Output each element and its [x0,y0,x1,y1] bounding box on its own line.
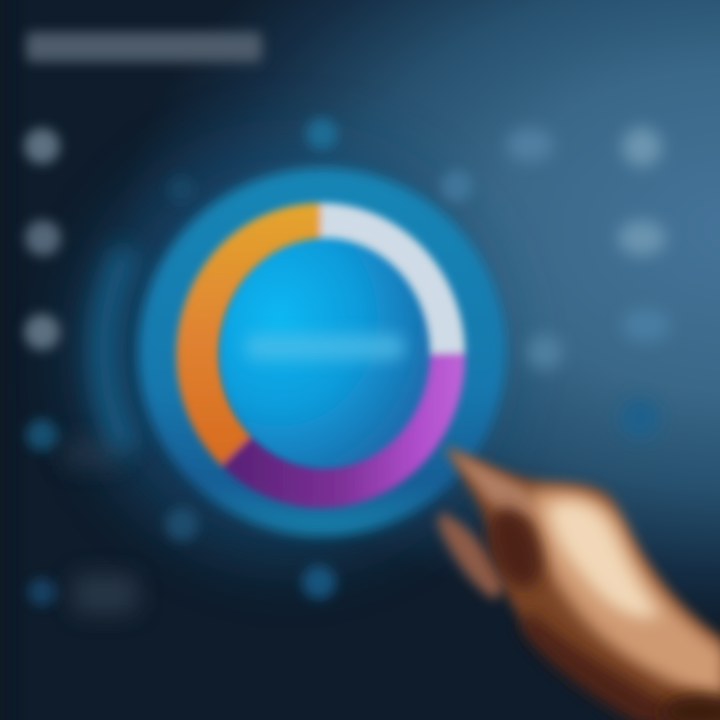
arm corner shadow [660,694,720,720]
title bar [26,32,262,62]
right marker 1 [506,128,554,162]
right side markers [506,127,670,438]
outer dial ticks [165,118,473,599]
marker 2 [25,220,61,256]
left column markers [24,128,61,606]
outer blue ring [138,168,506,536]
right marker 5 [622,308,670,342]
right marker 6 [620,398,660,438]
left edge vignette [0,0,10,720]
lower finger [438,512,505,600]
left column captions [64,440,138,614]
tick top [306,118,338,150]
white segment [321,225,443,355]
right marker 4 [527,334,563,370]
caption 5 [72,574,138,614]
tick bottom left [165,507,199,541]
hand pointing [438,447,720,720]
caption 4 [64,440,124,466]
tick top right [441,170,473,202]
marker 1 [24,128,60,164]
central label [245,334,405,360]
palm mid tone [530,489,720,700]
arm and palm [445,447,720,720]
glow behind chart [40,100,540,600]
orange segment [198,225,324,452]
index finger tone [445,447,545,520]
purple segment [237,353,443,486]
wrist shadow [520,610,700,720]
marker 5 [28,578,56,606]
right marker 3 [618,220,666,256]
tick bottom [302,565,336,599]
tick top left [168,176,196,204]
marker 3 [24,314,60,350]
ring chart [198,225,443,486]
right marker 2 [622,127,662,167]
palm shadow [478,500,552,596]
marker 4 [26,419,58,451]
central disc [220,238,430,468]
outer faint arc [104,250,128,450]
palm highlight [548,501,660,618]
